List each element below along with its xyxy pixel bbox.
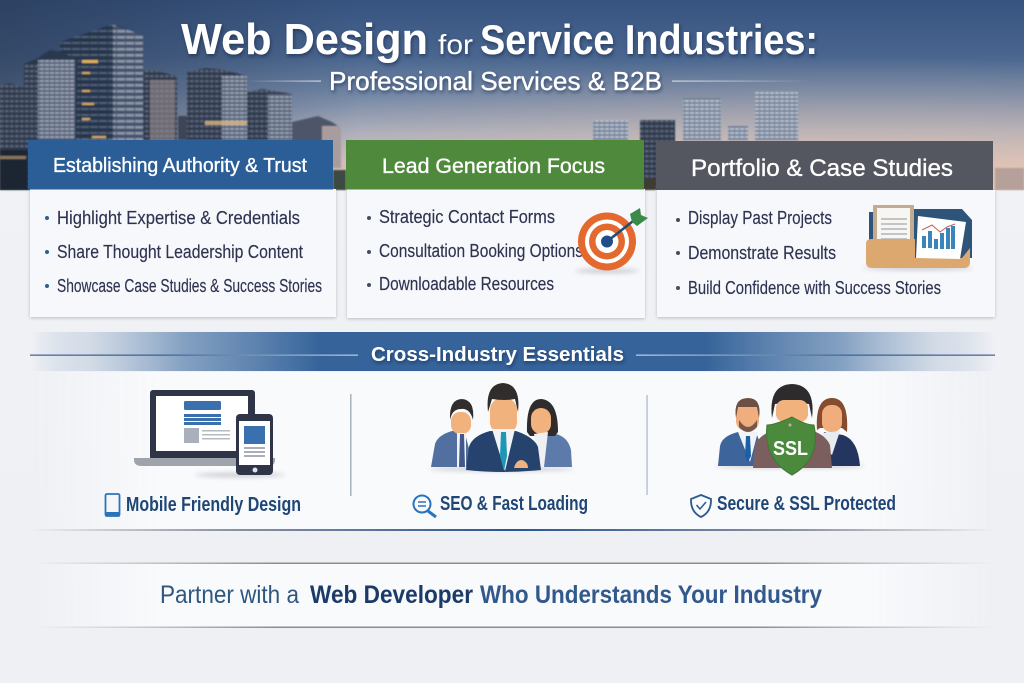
heading: establishing authority <box>28 140 333 190</box>
panel: establishing authority and trust <box>28 140 336 317</box>
bullet list: lead generation: Downloadable Resources <box>379 274 554 294</box>
heading: portfolio: Portfolio & Case Studies <box>691 155 953 182</box>
heading: lead generation <box>346 140 644 190</box>
label: seo and fast loading <box>414 493 588 517</box>
heading: lead generation: Lead Generation Focus <box>382 155 605 178</box>
title <box>181 15 818 64</box>
bullet list: authority <box>45 208 322 296</box>
call to action: Who Understands Your Industry <box>480 581 822 609</box>
column: seo and fast loading <box>414 383 588 517</box>
bullet list: lead generation <box>367 207 583 294</box>
heading: establishing authority: Establishing Authority & Trust <box>53 155 307 177</box>
panel: portfolio and case studies <box>656 141 995 317</box>
column: mobile friendly design <box>105 390 301 516</box>
icon: business team <box>429 383 573 472</box>
bullet list: authority: Share Thought Leadership Content <box>57 242 303 262</box>
title: Web Design <box>181 15 428 64</box>
essentials background <box>30 372 995 529</box>
bullet list: authority: Highlight Expertise & Credentials <box>57 208 300 228</box>
bullet list: authority: Showcase Case Studies & Success Stories <box>57 276 322 296</box>
icon: team with ssl shield <box>715 384 865 475</box>
label: mobile friendly design: Mobile Friendly Design <box>126 494 301 516</box>
column divider <box>646 395 648 495</box>
bullet list: portfolio: Demonstrate Results <box>688 243 836 263</box>
heading: portfolio <box>656 141 993 190</box>
label: secure and ssl protected: Secure & SSL Protected <box>717 493 896 515</box>
bullet list: portfolio: Build Confidence with Success Stories <box>688 278 941 298</box>
bullet list: portfolio: Display Past Projects <box>688 208 832 228</box>
column: secure and ssl protected <box>691 384 896 517</box>
section banner: cross-industry essentials <box>30 332 995 371</box>
bullet list: portfolio <box>676 208 941 298</box>
panel: lead generation focus <box>346 140 648 318</box>
bullet list: lead generation: Consultation Booking Options <box>379 241 583 261</box>
icon: laptop and phone <box>134 390 285 477</box>
title: for <box>438 29 473 60</box>
icon: target with arrow <box>575 208 648 273</box>
call to action: Web Developer <box>310 581 473 609</box>
column divider <box>350 394 351 496</box>
icon: team with ssl shield: SSL <box>773 438 808 460</box>
header: city skyline photo <box>0 0 1024 190</box>
label: secure and ssl protected <box>691 493 896 517</box>
call to action: Partner with a <box>160 581 299 609</box>
subtitle: Professional Services & B2B <box>329 66 662 96</box>
icon: portfolio folder <box>863 205 973 270</box>
title: Service Industries: <box>480 16 818 63</box>
label: seo and fast loading: SEO & Fast Loading <box>440 493 588 515</box>
bullet list: lead generation: Strategic Contact Forms <box>379 207 555 227</box>
call to action <box>30 562 995 628</box>
section banner: cross-industry essentials: Cross-Industry Essentials <box>371 344 624 366</box>
